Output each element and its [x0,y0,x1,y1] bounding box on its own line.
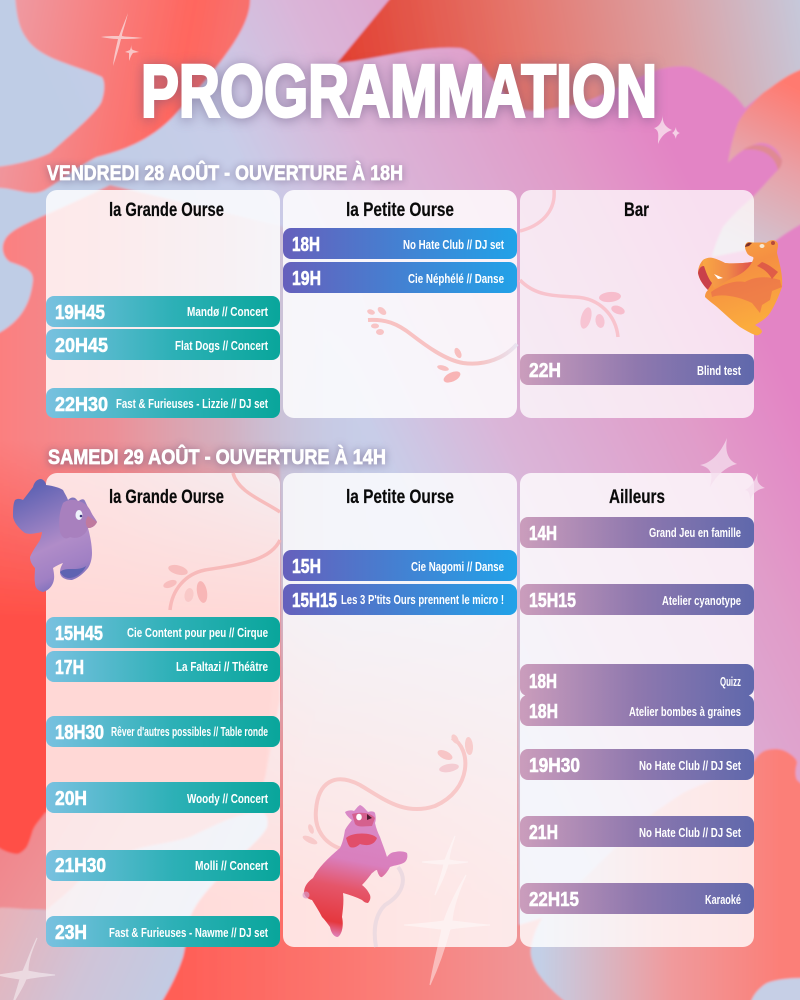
icon: red bear [302,805,407,937]
row 17H [46,651,280,682]
panel: samedi la Grande Ourse [46,473,280,947]
row 20H: Woody // Concert [187,791,269,806]
heading: Bar [624,200,649,221]
row 22H [520,354,754,385]
row 22H: 22H [529,359,561,382]
row 19H [283,262,517,293]
row 14H: Grand Jeu en famille [649,525,741,540]
row 21H [520,816,754,847]
branch decoration [162,473,280,610]
icon: orange bear [698,240,782,335]
sparkle: top right [654,115,680,144]
row 18H quizz: 18H [529,670,557,693]
row 18H30 [46,716,280,747]
row 20H [46,782,280,813]
panel: samedi la Petite Ourse [283,473,517,947]
panel: vendredi la Petite Ourse [283,190,517,418]
row 19H30 [520,749,754,780]
row 18H quizz [520,664,754,696]
branch decoration [301,733,474,947]
row 15H45: 15H45 [55,622,103,645]
row 15H15: 15H15 [292,589,337,612]
row 19H: 19H [292,267,321,290]
heading: samedi: SAMEDI 29 AOÛT - OUVERTURE À 14H [48,445,386,470]
row 18H: 18H [292,233,320,256]
panel: vendredi la Grande Ourse [46,190,280,418]
sparkle: bottom pair [404,836,490,985]
heading: vendredi: VENDREDI 28 AOÛT - OUVERTURE À 18H [47,160,403,185]
row 15H [283,550,517,581]
row 22H15: Karaoké [705,892,741,907]
heading: la Petite Ourse [346,200,454,221]
row 18H atelier: 18H [529,700,558,723]
row 22H30: 22H30 [55,393,108,416]
row 22H: Blind test [697,363,741,378]
row 19H30: No Hate Club // DJ Set [639,758,741,773]
row 18H30: 18H30 [55,721,104,744]
row 23H: 23H [55,921,87,944]
row 15H: Cie Nagomi // Danse [411,559,504,574]
row 15H15 [520,584,754,615]
heading: Ailleurs [609,487,665,508]
sparkle: samedi top right [700,438,765,501]
row 21H: No Hate Club // DJ Set [639,825,741,840]
panel: vendredi bar [520,190,754,418]
title: PROGRAMMATION [141,51,657,134]
branch decoration [366,305,517,385]
row 18H quizz: Quizz [720,674,741,689]
row 23H [46,916,280,947]
row 20H45: 20H45 [55,334,108,357]
row 20H: 20H [55,787,87,810]
row 22H30 [46,388,280,418]
row 21H30 [46,850,280,881]
row 22H15: 22H15 [529,888,579,911]
title: PROGRAMMATION [141,50,657,132]
heading: la Grande Ourse [109,487,224,508]
panel: samedi ailleurs [520,473,754,947]
icon: blue bear [13,479,97,592]
row 15H15: Atelier cyanotype [662,593,741,608]
row 15H45: Cie Content pour peu // Cirque [127,625,268,640]
row 18H [283,228,517,259]
sparkle: top left [101,13,143,66]
row 19H: Cie Néphélé // Danse [408,271,504,286]
heading: la Grande Ourse [109,200,224,221]
row 19H45: 19H45 [55,301,105,324]
row 15H15: Les 3 P'tits Ours prennent le micro ! [341,592,504,607]
row 15H: 15H [292,555,321,578]
sparkle: bottom left [0,938,55,1000]
row 18H atelier [520,695,754,726]
row 14H [520,517,754,548]
row 22H15 [520,883,754,914]
heading: vendredi: VENDREDI 28 AOÛT - OUVERTURE À 18H [47,161,403,186]
row 15H45 [46,617,280,648]
branch decoration [520,190,626,337]
heading: la Petite Ourse [346,487,454,508]
row 18H: No Hate Club // DJ set [403,237,505,252]
row 18H atelier: Atelier bombes à graines [629,704,741,719]
row 21H: 21H [529,821,558,844]
row 19H45 [46,296,280,327]
row 19H30: 19H30 [529,754,580,777]
row 14H: 14H [529,522,557,545]
heading: samedi: SAMEDI 29 AOÛT - OUVERTURE À 14H [48,444,386,469]
row 20H45: Flat Dogs // Concert [175,338,269,353]
row 23H: Fast & Furieuses - Nawme // DJ set [109,925,268,940]
row 17H: 17H [55,656,84,679]
row 20H45 [46,329,280,360]
row 22H30: Fast & Furieuses - Lizzie // DJ set [116,396,268,411]
row 21H30: Molli // Concert [195,858,269,873]
row 15H15: 15H15 [529,589,576,612]
row 15H15 [283,584,517,615]
row 21H30: 21H30 [55,854,106,877]
row 19H45: Mandø // Concert [187,304,269,319]
row 17H: La Faltazi // Théâtre [176,659,268,674]
row 18H30: Rêver d'autres possibles // Table ronde [111,724,268,739]
